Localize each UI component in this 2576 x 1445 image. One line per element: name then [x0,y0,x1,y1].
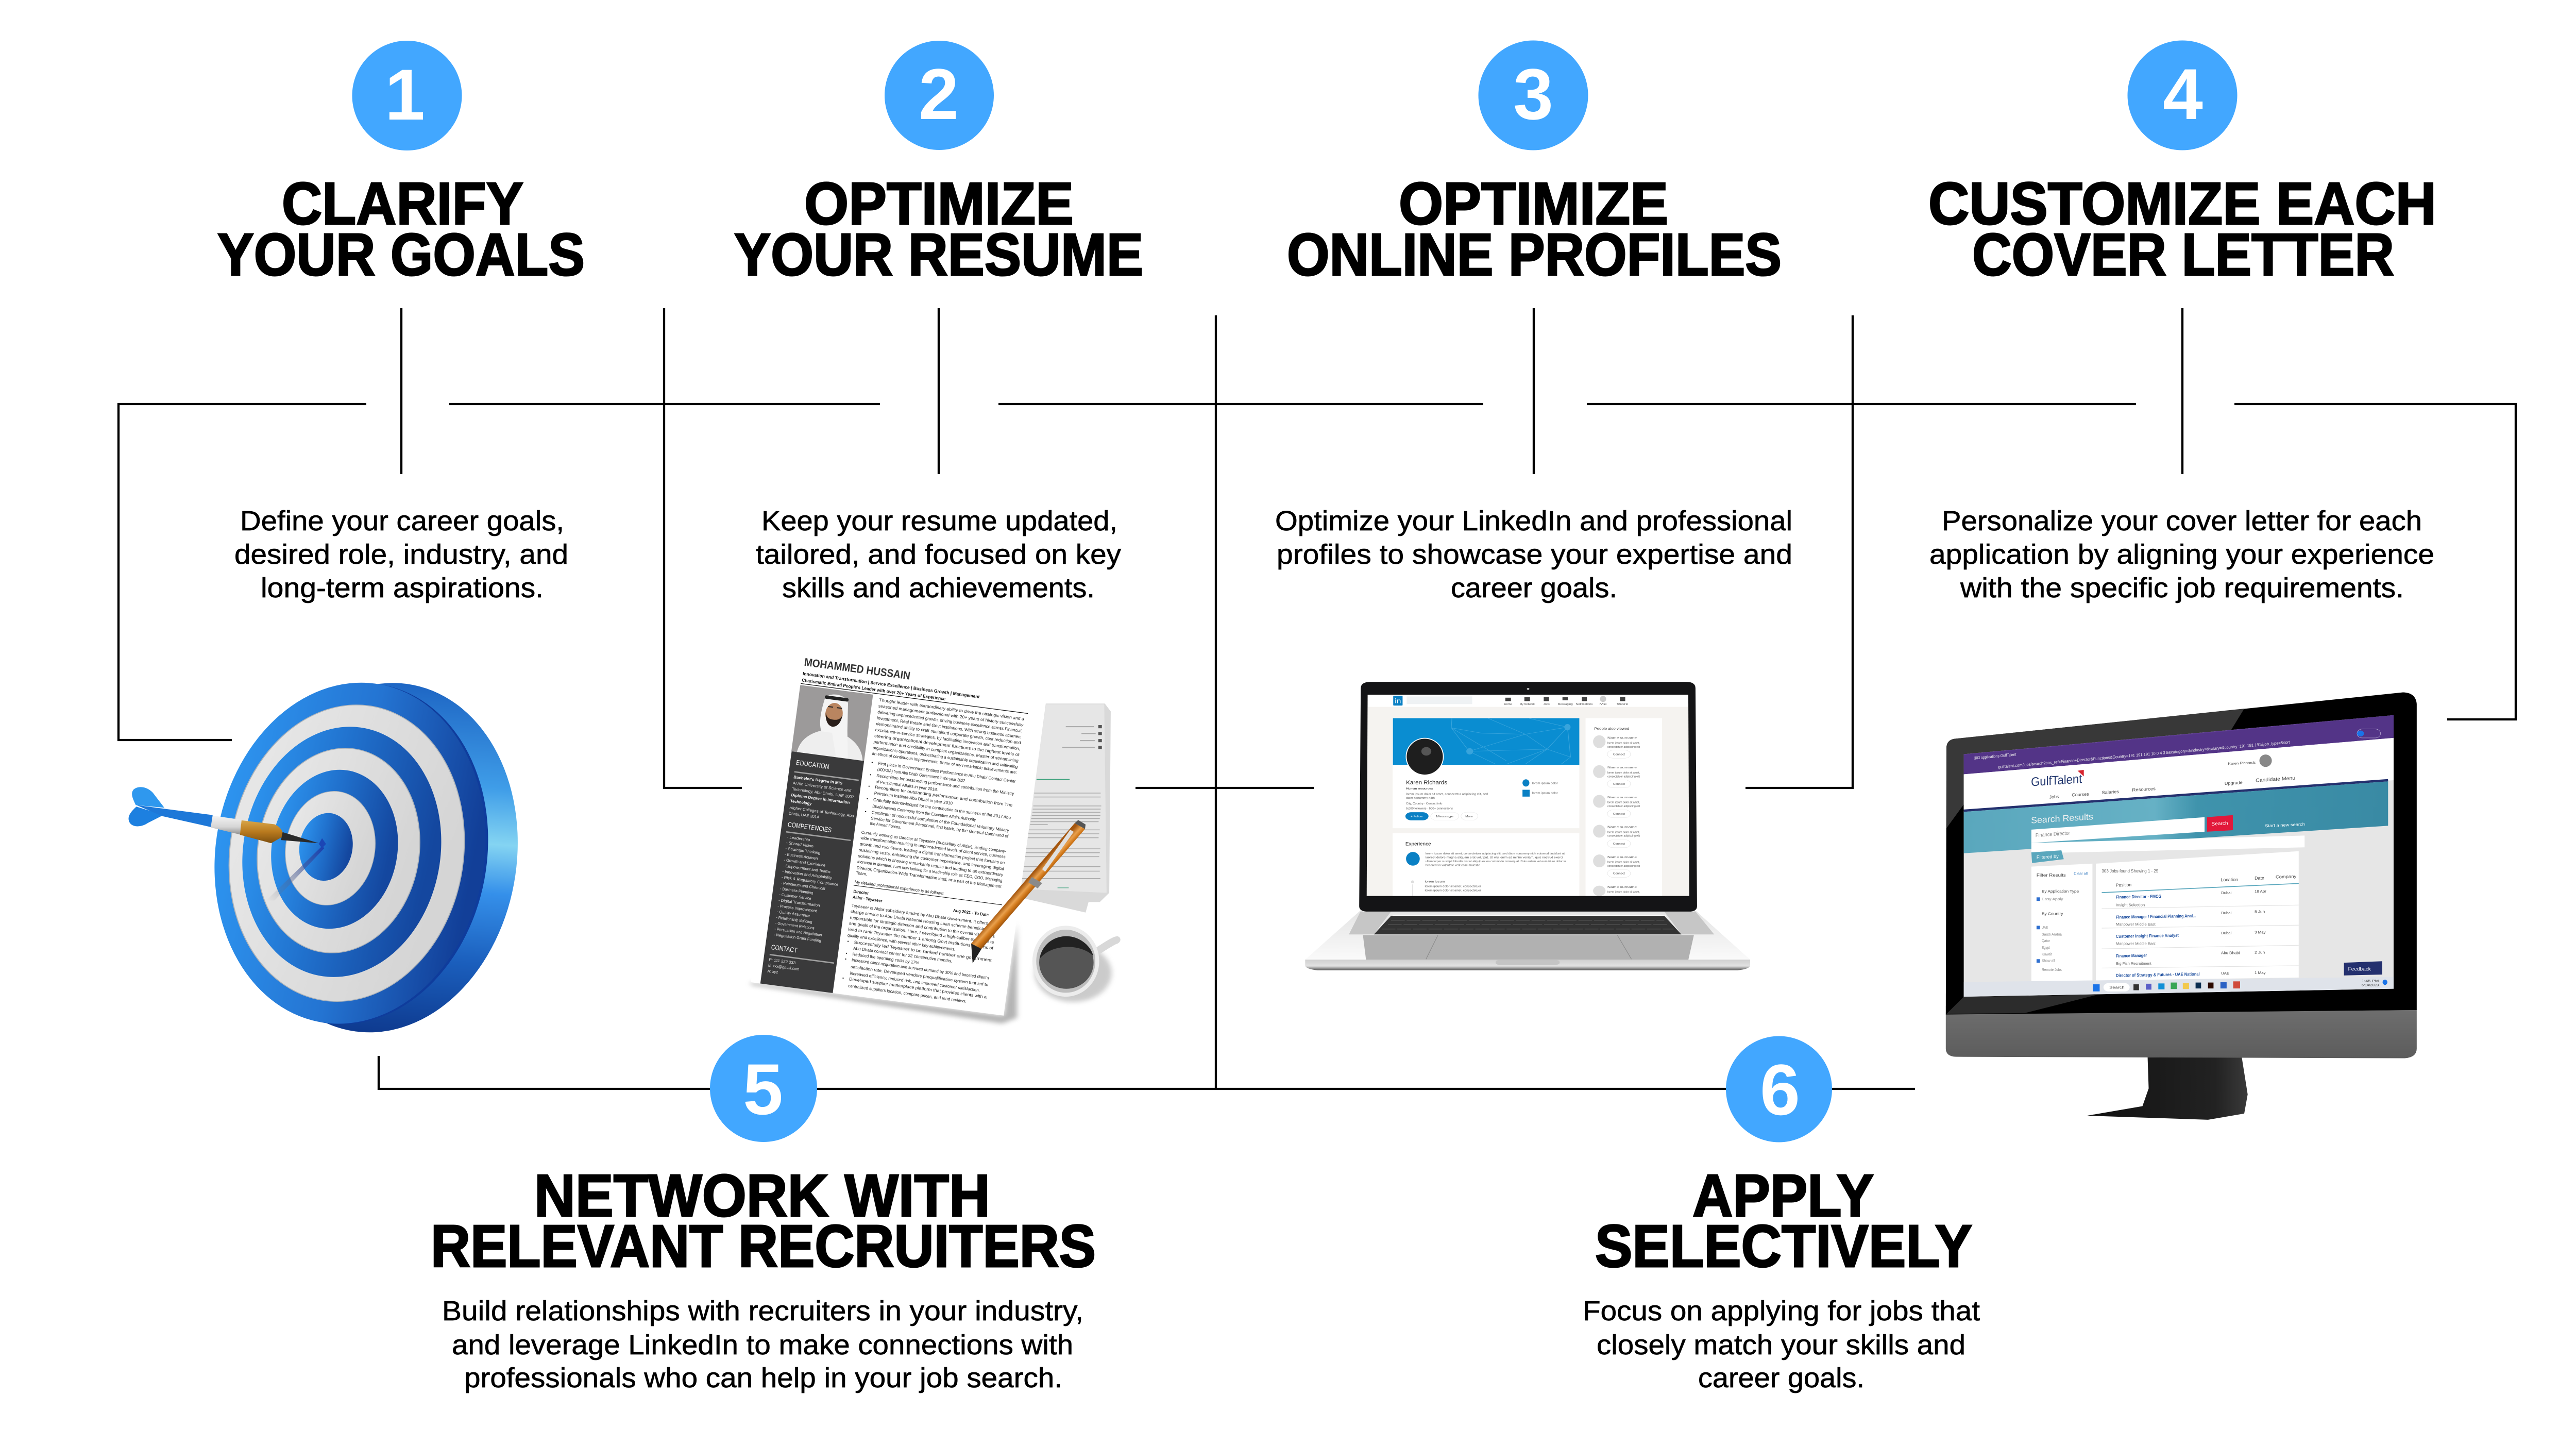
resume body text: solutions which is showing remarkable results and leading to an extraordinary [858,853,1004,877]
coffee cup [1032,926,1121,1002]
resume sidebar: COMPETENCIES [787,821,832,834]
page header: Karen Richards [2228,760,2256,766]
people also viewed card: People also viewed [1595,727,1630,731]
resume body text: Director [853,889,869,896]
resume sidebar: Diploma Degree in Information [791,793,850,805]
number badge 3 [1479,40,1588,150]
divider: step 2 vertical [938,308,940,474]
resume body text: Reduced the operating costs by 17% [852,952,920,965]
number badge 5: 5 [743,1049,783,1130]
resume body text: increased efficiency, reduced risk, and improved customer satisfaction. [850,971,980,993]
resume body text: lead to rank Teyaseer the number 1 among Govt Institutions in terms of [848,927,994,951]
panel: step 1 clarify your goals [217,41,585,603]
resume sidebar: - Negotiation Grant Funding [773,932,822,943]
profile card: lorem ipsum dolor [1532,791,1558,795]
panel: step 2 optimize your resume [734,41,1143,603]
description: step 6: closely match your skills and [1597,1330,1965,1360]
description: step 4 [1929,506,2434,603]
resume sidebar: - Leadership [787,835,810,842]
resume body text: seasoned management professional with 20+ years of history successfully [878,703,1024,728]
number badge 1 [352,41,462,150]
divider: step 1 vertical [400,308,402,474]
resume body text: of Presidential Affairs in year 2018. [875,779,938,792]
resume body text: • [847,939,849,944]
linkedin nav bar: Work [1617,702,1628,706]
job results table: UAE [2221,971,2230,976]
resume body text: sustaining costs, enhancing the customer experience, and leveraging digital [859,847,1004,871]
resume body text: increase in demand. I am now looking for a leadership role as CEO, COO, Managing [857,859,1003,883]
resume sidebar: Al Ain University of Science and [792,781,852,793]
experience card: lorem ipsum [1425,880,1445,883]
resume body text: satisfaction rate. Developed vendors prequalification system that led to [851,964,989,987]
job results table: 3 May [2255,930,2266,934]
profile card: Karen Richards [1406,780,1447,786]
resume body text: centralized suppliers location, compare prices, and read reviews. [848,983,967,1004]
pen [971,820,1086,963]
illustration: desktop monitor showing job search [1946,693,2417,1120]
connector: line from step 2 to resume image [449,308,880,788]
windows taskbar [1964,977,2394,997]
resume body text: quality and excellence, with several other key achievements: [847,933,956,952]
resume body text: • [865,809,867,814]
connector: line from step 4 to monitor image [2234,404,2516,719]
job results table: Finance Manager [2116,953,2147,959]
profile card: diam nonummy nibh [1406,796,1435,800]
people also viewed card: Name surname [1607,825,1637,829]
linkedin nav bar [1368,695,1688,707]
linkedin nav bar: My Network [1520,702,1535,706]
filter results panel: Show all [2042,959,2055,963]
panel: step 3 optimize online profiles [1275,40,1792,603]
resume sidebar: - Empowerment and Teams [783,864,831,874]
profile card: City, Country · Contact info [1406,802,1442,805]
resume body text: wide transformation resulting in unprecedented levels of client service, business [860,835,1006,859]
illustration: dartboard target with dart [129,674,535,1041]
number badge 6 [1726,1036,1832,1142]
number badge 3: 3 [1513,54,1553,135]
resume body text: My detailed professional experience is as follows: [854,880,944,896]
resume body text: First place in Government Entities Performance in Abu Dhabi Contact Center [878,761,1016,784]
resume sidebar: - Petroleum and Chemical [781,881,825,891]
resume sidebar: Technology, Abu Dhabi, UAE 2007 [792,787,855,799]
resume body text: Currently working as Director at Teyaseer (Subsidiary of Aldar), leading company- [861,830,1007,854]
experience card: lorem ipsum dolor sit amet, consectetuer [1425,884,1481,888]
people also viewed card: lorem ipsum dolor sit amet, [1607,741,1640,745]
panel: step 6 apply selectively [1583,1036,1980,1393]
people also viewed card: lorem ipsum dolor sit amet, [1607,860,1640,864]
experience card: lorem ipsum dolor sit amet, consectetuer [1425,888,1481,892]
teal search band: Search [2211,821,2228,827]
heading: optimize your resume [734,170,1143,288]
resume sidebar: A: xyz [767,969,778,974]
profile card: + Follow [1411,814,1423,818]
description: step 5: professionals who can help in your job search. [464,1363,1062,1393]
description: step 4: Personalize your cover letter for each [1942,506,2422,536]
linkedin nav bar: Jobs [1544,702,1550,706]
page header: Candidate Menu [2256,776,2295,783]
profile card: lorem ipsum dolor [1532,781,1558,785]
job results table: 5 Jun [2255,910,2265,914]
resume sidebar: Higher Colleges of Technology, Abu [789,805,854,818]
teal search band: Finance Director [2036,830,2070,838]
description: step 5: Build relationships with recruiters in your industry, [442,1296,1083,1326]
filter results panel: By Country [2042,912,2063,916]
job results table: Company [2276,874,2296,879]
job results table: Date [2255,876,2264,881]
back papers [1017,703,1111,913]
page header: GulfTalent [2031,771,2082,789]
description: step 3 [1275,506,1792,603]
job results table: Dubai [2221,931,2231,935]
resume body text: • [871,760,873,765]
laptop base [1305,911,1750,970]
experience card: hendrerit in vulputate velit esse molestie [1426,863,1480,867]
resume body text: performance and credibility in complex organizations. Master of streamlining [873,739,1019,763]
resume body text [840,697,1027,1006]
feedback button: Feedback [2348,966,2371,972]
teal search band: Search Results [2031,811,2093,825]
resume body text: Investment, Real Estate and Govt institutions. With strong business acumen, [876,715,1022,740]
people also viewed card: Name surname [1607,736,1637,740]
profile card: 5,000 followers · 500+ connections [1406,806,1453,810]
resume sidebar: Dhabi, UAE 2014 [788,811,819,819]
resume body text: • [845,951,848,956]
job results table: 303 Jobs found Showing 1 - 25 [2102,869,2158,873]
resume sidebar: Bachelor's Degree in MIS [793,775,843,786]
people also viewed card: consectetuer adipiscing elit [1607,745,1640,748]
resume name: MOHAMMED HUSSAIN [804,656,911,682]
feedback button [2344,961,2382,976]
description: step 3: Optimize your LinkedIn and professional [1275,506,1792,536]
people also viewed card: lorem ipsum dolor sit amet, [1607,890,1640,894]
profile card: lorem ipsum dolor sit amet, consectetur adipiscing elit, sed [1406,792,1488,796]
resume sidebar: - Government Relations [775,921,815,931]
heading: clarify your goals: CLARIFY [282,170,523,237]
heading: network with relevant recruiters: RELEVANT RECRUITERS [431,1213,1096,1280]
resume body text: (800KSA) from Abu Dhabi Government in the year 2022. [877,767,967,783]
resume sidebar: - Shared Vision [786,841,814,849]
people also viewed card: Connect [1613,782,1625,786]
job results table: Abu Dhabi [2221,951,2240,955]
dart [129,787,326,848]
resume sidebar: - Strategic Thinking [785,846,821,855]
job results table: Manpower Middle East [2116,942,2156,946]
number badge 6: 6 [1760,1049,1800,1130]
heading: network with relevant recruiters: NETWORK WITH [534,1162,990,1229]
description: step 1 [234,506,568,603]
page header: Courses [2072,792,2089,797]
illustration: resume on desk with pen and coffee [751,647,1121,1023]
job results table: 18 Apr [2255,889,2266,894]
resume sidebar: - Business Planning [779,886,814,895]
laptop lid [1359,682,1697,912]
people also viewed card: Name surname [1607,855,1637,859]
filter results panel: Remote Jobs [2042,968,2062,972]
resume body text: Certificate of successful completion of the Foundational Voluntary Military [871,810,1010,833]
job results table: Director of Strategy & Futures - UAE National [2116,972,2200,978]
resume body text: Successfully led Teyaseer to be ranked number one government [854,939,992,963]
resume body text: growth and excellence, leading a digital transformation project that focuses on [859,842,1005,865]
people also viewed card: consectetuer adipiscing elit [1607,834,1640,837]
resume photo [791,685,873,761]
experience card: Experience [1405,842,1431,847]
job results table: Big Fish Recruitment [2116,962,2152,966]
resume body text: Team. [856,870,868,877]
teal search band: Filtered by [2037,854,2059,860]
filter results panel: By Application Type [2042,889,2079,894]
resume body text: and goals of the organization. Here, I developed a high-caliber executive te [849,921,994,945]
heading: apply selectively: SELECTIVELY [1595,1213,1972,1280]
resume body text: excellence-in-service strategies, by facilitating innovation and transformation, [875,727,1021,751]
description: step 4: with the specific job requirements. [1960,573,2404,603]
resume body text: Aldar - Teyaseer [852,895,883,903]
people also viewed card: Connect [1613,812,1625,816]
monitor stand [2087,1057,2248,1120]
resume body text: Gratefully acknowledged for the contribution to the success of the 2017 Abu [873,797,1011,820]
monitor screen [1964,715,2394,997]
resume body text: Increased client acquisition and services demand by 30% and boosted client's [851,957,990,980]
browser chrome: gulftalent.com/jobs/search?pos_ref=Finance+Director&Functions&Country=191 191 191 10 0 4 3 8&category=&industry=&salary=&country=191 191 191&job_type=&sort [1998,740,2290,769]
people also viewed card: Connect [1613,871,1625,875]
description: step 6: Focus on applying for jobs that [1583,1296,1980,1326]
filter results panel: Saudi Arabia [2042,932,2062,936]
resume sidebar [760,751,864,993]
page header [1964,738,2394,811]
heading: customize each cover letter [1928,170,2436,288]
dart shadow [266,846,325,900]
resume body text: the Armed Forces. [870,821,902,830]
number badge 4: 4 [2163,54,2203,135]
windows taskbar: 1:45 PM [2362,980,2379,983]
filter results panel: Kuwait [2042,952,2053,956]
number badge 2 [885,41,994,150]
resume body text: Recognition for outstanding performance and contribution from The [875,784,1013,808]
job results table: Finance Director - FMCG [2116,894,2161,899]
people also viewed card: lorem ipsum dolor sit amet, [1607,770,1640,775]
browser chrome: 303 applications GulfTalent [1974,752,2016,761]
windows taskbar: Search [2109,985,2125,990]
profile card: Human resources [1406,787,1433,791]
number badge 2: 2 [919,54,959,135]
heading: clarify your goals: YOUR GOALS [217,221,585,288]
resume body text: Recognition for outstanding performance and contribution from the Ministry [876,773,1015,796]
heading: optimize online profiles: OPTIMIZE [1399,170,1668,237]
description: step 3: profiles to showcase your expertise and [1277,539,1792,570]
resume sidebar: - Growth and Excellence [784,858,826,868]
resume headline: Charismatic Emirati People's Leader with over 20+ Years of Experience [802,678,946,701]
linkedin nav bar: Me [1599,702,1607,706]
divider: step 4 vertical [2181,308,2183,474]
heading: clarify your goals [217,170,585,288]
resume body text: Abu Dhabi contact center for 22 consecutive months. [853,946,953,964]
resume sidebar: - Innovation and Adaptability [782,869,833,880]
description: step 3: career goals. [1451,573,1617,603]
resume body text: Dhabi Awards Ceremony from the Executive Affairs Authority [872,803,976,822]
illustration: laptop showing linkedin profile [1305,682,1750,970]
job results table: Manpower Middle East [2116,922,2156,927]
resume body text: Service for Government Personnel, first batch, by the General Command of [871,816,1009,838]
resume sidebar: - Digital Transformation [778,898,820,908]
resume sidebar: P: 111 222 333 [769,957,796,965]
people also viewed card [1586,718,1662,896]
heading: network with relevant recruiters [431,1162,1096,1280]
monitor body [1946,693,2417,1058]
resume sidebar: - Risk & Regulatory Compliance [781,875,839,887]
filter results panel: Easy Apply [2042,897,2063,901]
resume body text: an ethos of continuous improvement. Some of my remarkable achievements are: [872,751,1017,775]
people also viewed card: Connect [1613,752,1625,756]
resume sidebar: - Quality Assurance [776,910,810,918]
description: step 2: Keep your resume updated, [761,506,1117,536]
experience card: laoreet dolore magna aliquam erat volutpat. Ut wisi enim ad minim veniam, quis nostrud exerci [1426,855,1563,859]
filter results panel: UAE [2042,926,2048,930]
profile card: More [1465,814,1473,818]
filter results panel [2031,864,2092,981]
heading: customize each cover letter: COVER LETTER [1972,221,2394,288]
page shadow [751,923,1017,1023]
description: step 6: career goals. [1698,1363,1865,1393]
job results table: Insight Selection [2116,903,2145,907]
experience card: ullamcorper suscipit lobortis nisl ut aliquip ex ea commodo consequat. Duis autem vel eum iriure dolor in [1426,859,1566,863]
job results table: Position [2116,882,2131,887]
description: step 6 [1583,1296,1980,1393]
heading: apply selectively [1595,1162,1972,1280]
page header: Salaries [2102,789,2119,795]
people also viewed card: Connect [1613,842,1625,846]
resume headline: Innovation and Transformation | Service Excellence | Business Growth | Management [803,671,980,699]
resume body text: delivering unprecedented growth, driving business excellence across Financial, [877,710,1023,733]
description: step 5: and leverage LinkedIn to make connections with [452,1330,1073,1360]
resume sidebar: Technology [790,799,812,806]
people also viewed card: consectetuer adipiscing elit [1607,804,1640,808]
job results table [2096,851,2299,981]
resume sidebar: - Customer Service [779,892,811,901]
linkedin nav bar: Notifications [1576,702,1593,706]
resume body text: charge service to Abu Dhabi National Housing Loan scheme beneficiaries. I [851,909,996,933]
windows taskbar: 6/14/2023 [2362,984,2379,987]
filter results panel: Filter Results [2037,873,2066,878]
people also viewed card: lorem ipsum dolor sit amet, [1607,830,1640,834]
filter results panel: Qatar [2042,939,2050,943]
resume sidebar: - Persuasion and Negotiation [774,927,822,937]
job results table: Dubai [2221,911,2231,915]
job results table: 1 May [2255,971,2266,975]
page header: Resources [2132,786,2156,793]
connector: bottom line linking steps 5 and 6 [379,1056,1915,1089]
job results table: 2 Jun [2255,950,2265,954]
resume sidebar: E: xxx@gmail.com [768,963,800,971]
resume body text: Director, Organization-Wide Transformation lead, or a part of the Management [856,865,1002,889]
job results table: Location [2221,877,2238,882]
resume body text: Teyaseer is Aldar subsidiary funded by Abu Dhabi Government. It offers free [851,903,997,927]
job results table: Finance Manager / Financial Planning Anal... [2116,914,2196,919]
linkedin nav bar: in [1395,698,1401,705]
resume sidebar: - Relationship Building [776,915,812,925]
page header: Upgrade [2225,780,2243,786]
resume body text: • [842,976,844,981]
people also viewed card: Name surname [1607,796,1637,799]
resume sidebar: - Business Acumen [784,852,818,861]
profile card [1393,718,1579,828]
resume body text: • [866,796,869,801]
resume sidebar: EDUCATION [795,759,830,771]
number badge 4 [2128,40,2237,150]
heading: customize each cover letter: CUSTOMIZE EACH [1928,170,2436,237]
people also viewed card: Name surname [1607,885,1637,888]
panel: step 5 network with relevant recruiters [431,1035,1096,1393]
teal search band: Start a new search [2265,822,2305,828]
people also viewed card: consectetuer adipiscing elit [1607,775,1640,778]
heading: optimize your resume: OPTIMIZE [804,170,1074,237]
connector: line from step 1 to target image [118,404,366,740]
profile card: Message [1436,814,1453,818]
people also viewed card: Name surname [1607,765,1637,769]
divider: step 3 vertical [1533,308,1535,474]
heading: apply selectively: APPLY [1692,1162,1874,1229]
resume sidebar: - Process Improvement [777,904,817,913]
heading: optimize your resume: YOUR RESUME [734,221,1143,288]
linkedin nav bar: Messaging [1558,702,1573,706]
job results table: Customer Insight Finance Analyst [2116,933,2179,939]
description: step 1: Define your career goals, [240,506,564,536]
profile photo [1405,738,1444,776]
people also viewed card: consectetuer adipiscing elit [1607,864,1640,867]
description: step 5 [442,1296,1083,1393]
filter results panel: Clear all [2074,871,2088,876]
description: step 2: skills and achievements. [782,573,1095,603]
resume sidebar: CONTACT [771,944,798,954]
description: step 2 [756,506,1121,603]
connector: line from step 3 to laptop image [998,315,1483,1089]
description: step 1: desired role, industry, and [234,539,568,570]
linkedin nav bar: Home [1504,702,1512,706]
people also viewed card: lorem ipsum dolor sit amet, [1607,800,1640,804]
laptop screen [1367,688,1689,896]
page header: Jobs [2049,794,2059,799]
heading: optimize online profiles [1287,170,1782,288]
resume body text: • [870,772,872,777]
number badge 1: 1 [385,54,425,135]
teal search band [1964,780,2388,863]
experience card [1393,833,1579,896]
connector: line from step 4 to laptop image [1587,315,2136,788]
browser chrome [1964,715,2394,775]
panel: step 4 customize each cover letter [1928,40,2436,603]
resume body text: Thought leader with extraordinary ability to drive the strategic vision and a [879,697,1025,721]
description: step 2: tailored, and focused on key [756,539,1121,570]
resume body text: Developed supplier marketplace platform that provides clients with a [849,977,987,999]
resume body text: • [844,956,847,962]
resume body text: • [868,784,870,788]
resume body text: demonstrated ability to craft sustained corporate growth, cost reduction and [876,721,1021,745]
resume body text: organization's operations, orchestrating a sustainable organization and cultivating [872,745,1018,769]
resume page [751,647,1049,1016]
resume body text: steering organizational development functions to the highest levels of [874,733,1020,757]
description: step 1: long-term aspirations. [261,573,544,603]
experience card: lorem ipsum dolor sit amet, consectetuer adipiscing elit, sed diam nonummy nibh euismod tincidunt ut [1426,852,1565,855]
job results table: Dubai [2221,891,2231,895]
filter results panel: Egypt [2042,946,2050,950]
description: step 4: application by aligning your experience [1929,539,2434,570]
number badge 5 [710,1035,817,1142]
resume body text: responsible for strategic direction and contribution to the overall vision, mis [850,915,995,939]
resume body text: Aug 2021 - To Date [953,908,989,917]
heading: optimize online profiles: ONLINE PROFILES [1287,221,1782,288]
resume body text: Petroleum Institute Abu Dhabi in year 2010 [874,791,953,806]
